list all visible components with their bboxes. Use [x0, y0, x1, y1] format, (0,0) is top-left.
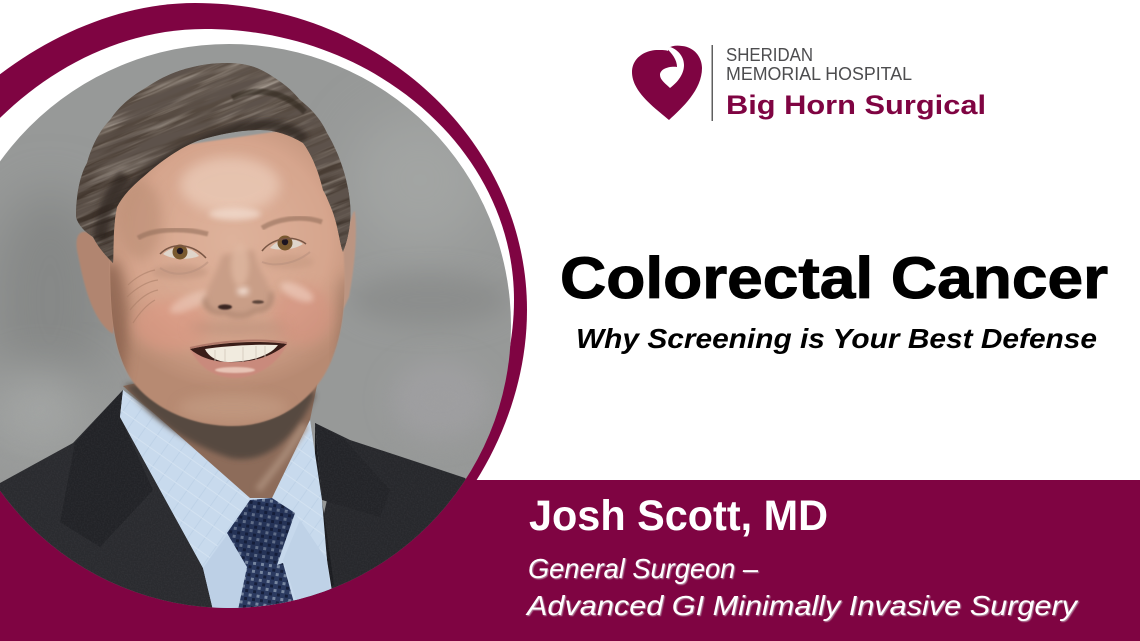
presenter name: Josh Scott, MD — [529, 492, 828, 540]
logo: Sheridan Memorial Hospital Big Horn Surgical — [632, 45, 986, 121]
logo divider — [712, 45, 713, 121]
logo text: Big Horn Surgical: Big Horn Surgical — [726, 90, 986, 120]
logo text: Memorial Hospital: MEMORIAL HOSPITAL — [726, 64, 912, 84]
necktie — [227, 498, 296, 610]
ears — [76, 211, 356, 334]
face — [96, 128, 353, 426]
dress shirt — [120, 390, 335, 610]
white ring gap — [0, 29, 514, 496]
hair texture — [76, 63, 350, 262]
suit jacket — [0, 390, 466, 608]
jacket lapels — [60, 390, 153, 547]
smiling mouth — [190, 341, 287, 378]
role line 1: General Surgeon – — [528, 553, 758, 584]
icon: heart with swirl — [632, 46, 702, 120]
nose — [205, 243, 271, 316]
title: Colorectal Cancer — [560, 246, 1108, 311]
role line 2: Advanced GI Minimally Invasive Surgery — [525, 590, 1079, 621]
left eye — [160, 244, 208, 274]
bottom maroon band — [0, 480, 1140, 641]
photo backdrop — [0, 40, 520, 620]
right eye — [262, 236, 310, 264]
eyebrows — [138, 218, 322, 238]
subtitle: Why Screening is Your Best Defense — [576, 323, 1097, 354]
skin shading — [96, 157, 353, 422]
maroon outer ring — [0, 3, 527, 481]
hair — [76, 63, 350, 263]
portrait photo — [0, 44, 511, 608]
logo text: Sheridan: SHERIDAN — [726, 45, 813, 65]
presenter role — [525, 553, 1079, 621]
neck — [123, 381, 318, 498]
